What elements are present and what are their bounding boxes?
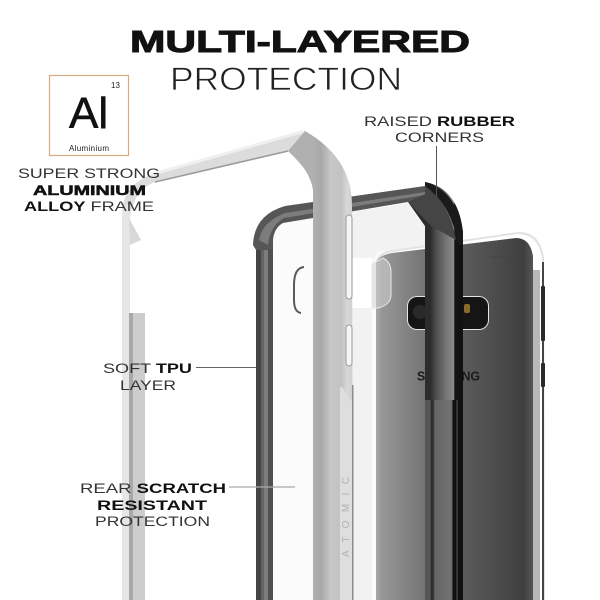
- aluminium element tile: Aluminium: [69, 144, 109, 153]
- TPU bumper frame: [253, 182, 463, 600]
- aluminium element tile: 13: [111, 81, 120, 90]
- aluminium element tile: [50, 76, 128, 156]
- aluminium frame: [122, 131, 354, 600]
- clear rear panel: [273, 200, 425, 600]
- callout: aluminium alloy frame: ALLOY FRAME: [24, 199, 154, 214]
- callout: rear scratch resistant protection: REAR SCRATCH: [80, 481, 226, 496]
- side buttons: [541, 286, 545, 341]
- left rail: [122, 205, 130, 600]
- button slots: [346, 215, 352, 299]
- callout: raised rubber corners: CORNERS: [395, 130, 484, 145]
- frame brand mark: ATOMIC: [341, 477, 352, 557]
- callout: raised rubber corners: [364, 114, 515, 197]
- callout: rear scratch resistant protection: PROTECTION: [95, 514, 210, 529]
- phone camera module: [407, 296, 489, 330]
- clear case camera cutout: [372, 258, 391, 308]
- callout: raised rubber corners: RAISED RUBBER: [364, 114, 515, 129]
- phone body: [376, 232, 545, 600]
- callout: aluminium alloy frame: SUPER STRONG: [18, 166, 160, 181]
- callout: rear scratch resistant protection: RESISTANT: [97, 498, 208, 513]
- callout: soft TPU layer: [103, 361, 256, 393]
- callout: soft TPU layer: SOFT TPU: [103, 361, 192, 376]
- lower light panel: [340, 387, 352, 600]
- callout: rear scratch resistant protection: [80, 481, 295, 529]
- aluminium element tile: Al: [69, 89, 108, 138]
- phone brand: SAMSUNG: [417, 368, 480, 384]
- title: PROTECTION: [170, 61, 402, 97]
- title: [130, 24, 470, 97]
- silver camera ring on TPU layer: [294, 267, 304, 313]
- callout: aluminium alloy frame: [18, 166, 160, 214]
- title: MULTI-LAYERED: [130, 24, 470, 59]
- callout: aluminium alloy frame: ALUMINIUM: [33, 183, 146, 198]
- bumper right rail with raised corner: [408, 182, 463, 400]
- callout: soft TPU layer: LAYER: [120, 378, 176, 393]
